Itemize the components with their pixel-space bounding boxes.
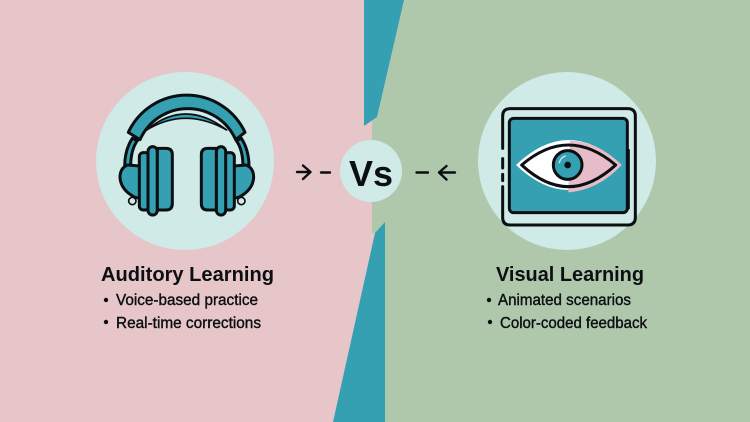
vs badge: Vs <box>349 153 393 194</box>
heading: auditory learning: Auditory Learning <box>101 264 274 286</box>
teal wedge: bottom <box>333 222 385 422</box>
bullet list: visual: Animated scenarios <box>498 292 631 309</box>
panel: visual background <box>372 0 750 422</box>
icon: headphones <box>120 95 254 215</box>
panel: auditory background <box>0 0 372 422</box>
bullet list: auditory: Voice-based practice <box>116 292 258 309</box>
bullet list: auditory <box>104 292 261 332</box>
panel: auditory learning <box>96 72 274 332</box>
bullet list: visual: Color-coded feedback <box>500 315 648 332</box>
icon circle: auditory <box>96 72 274 250</box>
heading: visual learning: Visual Learning <box>496 264 644 286</box>
pink lower fill <box>0 233 375 422</box>
icon: eye on screen <box>503 109 635 225</box>
arrow: left pointing to vs <box>297 166 330 179</box>
arrow: right pointing to vs <box>416 166 455 180</box>
bullet list: auditory: Real-time corrections <box>116 315 261 332</box>
teal wedge: top <box>364 0 404 126</box>
icon circle: visual <box>478 72 656 250</box>
panel: visual learning <box>478 72 656 332</box>
bullet list: visual <box>487 292 648 332</box>
vs badge <box>340 140 402 202</box>
